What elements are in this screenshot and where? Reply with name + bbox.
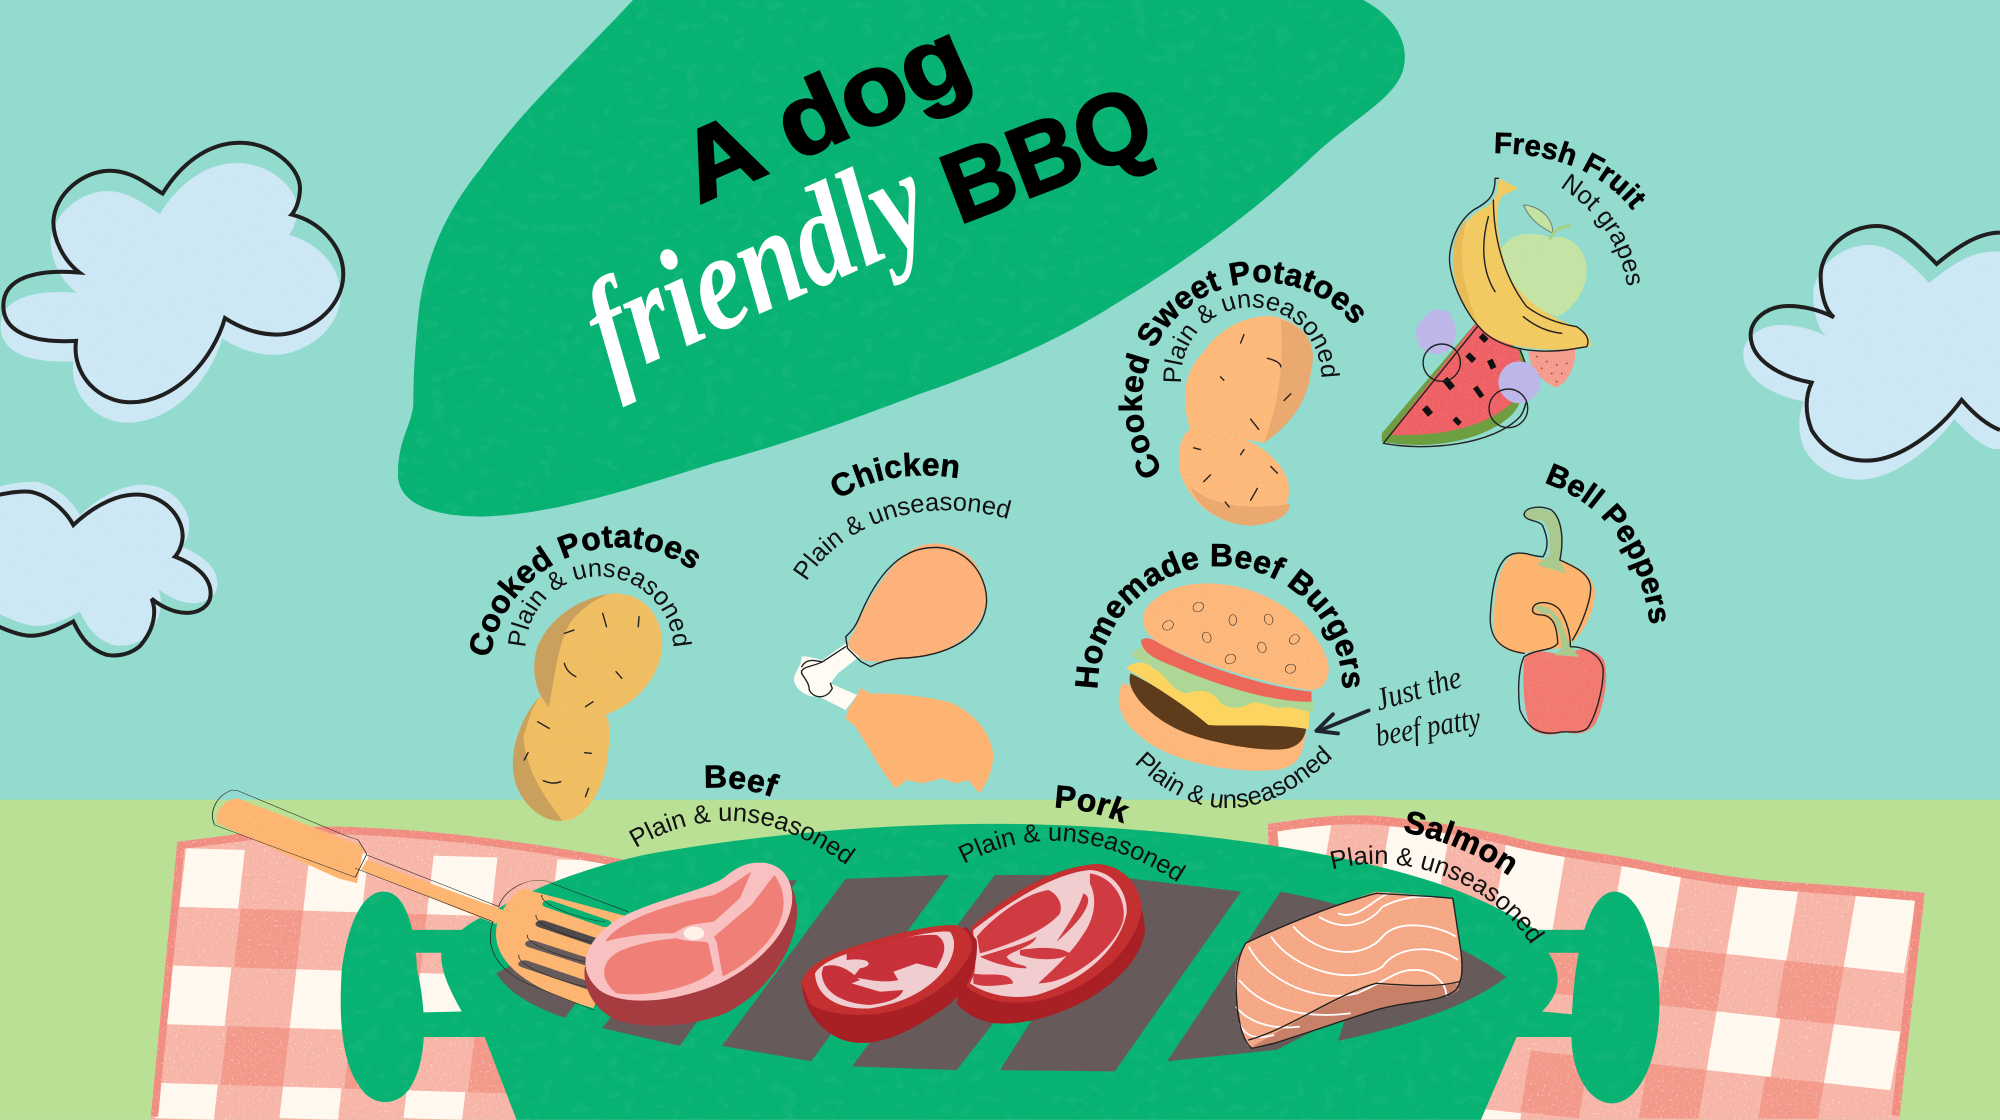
cloud: lower left bbox=[0, 482, 217, 655]
grill grates bbox=[496, 875, 1506, 1071]
handwritten note line 1: Just the bbox=[1371, 659, 1465, 717]
icon: homemade beef burger bbox=[1119, 583, 1329, 771]
label: bell peppers: Bell Peppers bbox=[1546, 463, 1666, 624]
label: homemade beef burgers bbox=[1075, 544, 1360, 808]
label: cooked sweet potatoes bbox=[1118, 262, 1364, 478]
picnic towel: right bbox=[1222, 813, 1925, 1120]
burger lettuce bbox=[1131, 647, 1314, 712]
label: salmon bbox=[1330, 812, 1546, 944]
red pepper bbox=[1519, 603, 1606, 735]
burger cheese bbox=[1126, 662, 1309, 729]
burger top bun bbox=[1143, 583, 1329, 690]
picnic towel: left bbox=[151, 827, 663, 1120]
burger patty bbox=[1130, 673, 1306, 750]
note: Plain & unseasoned bbox=[1136, 744, 1332, 808]
icon: cooked potatoes bbox=[513, 593, 662, 821]
burger sesame seeds bbox=[1160, 601, 1301, 675]
note: Plain & unseasoned bbox=[1330, 845, 1546, 944]
apple bbox=[1502, 205, 1587, 317]
heading: Homemade Beef Burgers bbox=[1075, 544, 1360, 688]
watermelon slice bbox=[1382, 322, 1528, 447]
fork handle and head bbox=[217, 798, 628, 1008]
title line: friendly: friendly bbox=[560, 121, 951, 408]
note: Plain & unseasoned bbox=[508, 562, 692, 646]
arrow bbox=[1316, 710, 1369, 733]
fork bbox=[213, 790, 628, 1010]
icon: cooked sweet potatoes bbox=[1179, 316, 1313, 526]
cloud: right bbox=[1743, 226, 2000, 480]
handwritten note line 2: beef patty bbox=[1373, 700, 1484, 753]
icon: bell peppers bbox=[1490, 507, 1606, 735]
berries bbox=[1416, 308, 1540, 428]
heading: Salmon bbox=[1404, 812, 1516, 876]
banana bbox=[1450, 178, 1591, 351]
heading: Fresh Fruit bbox=[1495, 132, 1646, 210]
icon: fresh fruit bbox=[1382, 178, 1591, 447]
note: Not grapes bbox=[1562, 174, 1640, 286]
title line: BBQ: BBQ bbox=[927, 65, 1167, 245]
pork slice: small bbox=[802, 925, 977, 1043]
label: cooked potatoes bbox=[470, 526, 699, 655]
grill body and handles bbox=[341, 824, 1659, 1120]
label: fresh fruit bbox=[1495, 132, 1646, 286]
title line: A dog: A dog bbox=[663, 0, 985, 224]
grass ground bbox=[0, 800, 2000, 1120]
callout: just the beef patty bbox=[1316, 659, 1484, 753]
cloud: upper left bbox=[1, 143, 343, 423]
label: pork bbox=[958, 785, 1186, 882]
steak: beef bbox=[584, 863, 797, 1026]
heading: Pork bbox=[1056, 785, 1130, 824]
burger bottom bun bbox=[1119, 683, 1305, 771]
note: Plain & unseasoned bbox=[958, 824, 1186, 882]
label: chicken bbox=[793, 452, 1012, 580]
pork: slices bbox=[802, 864, 1145, 1043]
heading: Cooked Potatoes bbox=[470, 526, 699, 655]
pork slice: large bbox=[957, 864, 1145, 1024]
green title blob bbox=[398, 0, 1405, 517]
label: beef bbox=[629, 765, 856, 864]
heading: Cooked Sweet Potatoes bbox=[1118, 262, 1364, 478]
fork slots bbox=[525, 904, 605, 987]
icon: chicken drumsticks bbox=[794, 543, 993, 793]
grill bbox=[341, 824, 1659, 1120]
sky background bbox=[0, 0, 2000, 801]
title bbox=[560, 0, 1167, 408]
note: Plain & unseasoned bbox=[1163, 294, 1340, 382]
heading: Beef bbox=[706, 765, 780, 797]
heading: Chicken bbox=[832, 452, 958, 496]
note: Plain & unseasoned bbox=[793, 496, 1012, 580]
burger tomato bbox=[1141, 638, 1312, 702]
note: Plain & unseasoned bbox=[629, 805, 856, 864]
orange pepper bbox=[1490, 507, 1595, 653]
salmon fillet bbox=[1235, 892, 1462, 1048]
strawberry bbox=[1528, 348, 1575, 387]
fork outline bbox=[213, 790, 628, 1010]
